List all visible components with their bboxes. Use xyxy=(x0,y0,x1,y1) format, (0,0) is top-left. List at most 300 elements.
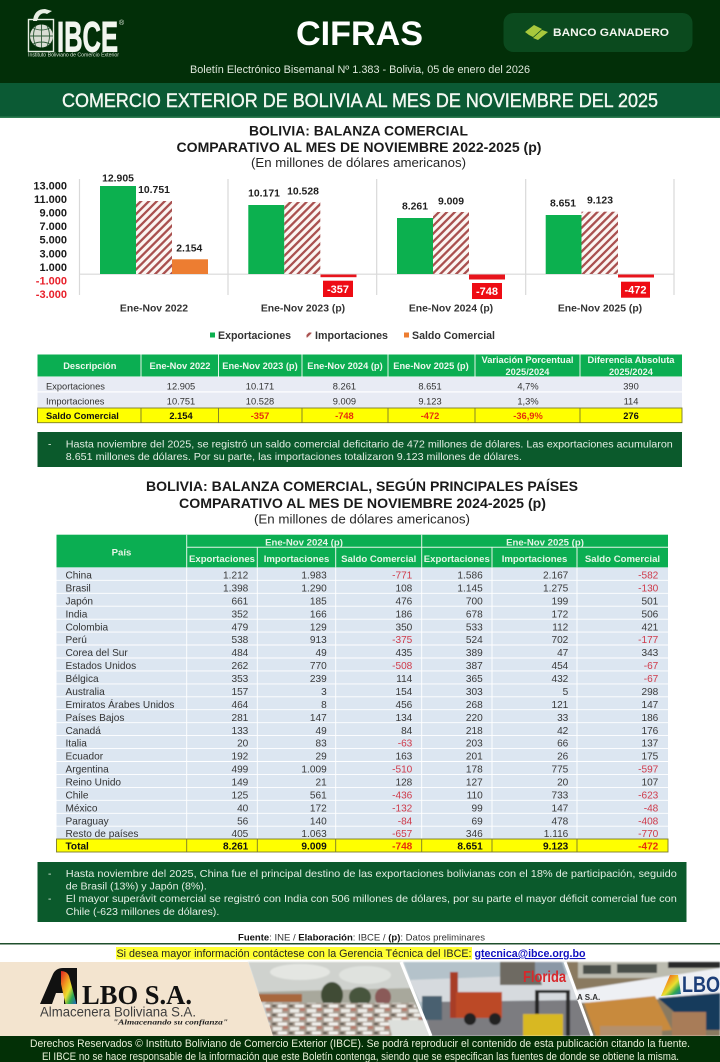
row: Australia: 157 xyxy=(231,687,249,698)
bars: Ene-Nov 2024: 8.261 xyxy=(402,202,428,213)
callout: saldo comercial: 8.651 millones de dólares. Por su parte, las importaciones totalizaron 9.123 millones de dólares. xyxy=(66,452,522,463)
table header: Exportaciones xyxy=(189,554,255,565)
y axis labels: 3.000 xyxy=(39,248,67,260)
row: Exportaciones: 390 xyxy=(623,381,639,391)
table: resumen balanza comercial xyxy=(38,354,682,423)
row: Brasil: 108 xyxy=(395,583,413,594)
callout: principales socios: - xyxy=(48,894,51,905)
row: Importaciones: Importaciones xyxy=(46,396,105,406)
row: Emiratos Arabes Unidos: Emiratos Árabes Unidos xyxy=(66,698,174,711)
table header: País xyxy=(112,548,131,558)
row: Emiratos Arabes Unidos xyxy=(66,698,659,711)
callout: principales socios: Hasta noviembre del 2025, China fue el principal destino de las exportaciones bolivianas con el 18% de participación, seguido xyxy=(66,869,677,880)
bars: Ene-Nov 2024: -748 xyxy=(476,286,498,298)
row: Paraguay: 478 xyxy=(551,816,569,827)
table header: Importaciones xyxy=(264,554,329,565)
row: China: China xyxy=(66,570,92,582)
row: Ecuador: 201 xyxy=(466,752,483,763)
bars: Ene-Nov 2025: 8.651 xyxy=(550,199,576,210)
row: Canada: 133 xyxy=(231,726,249,737)
row: Canada: 176 xyxy=(641,726,659,737)
row: Resto de paises xyxy=(66,829,659,840)
row: Estados Unidos: 262 xyxy=(231,661,249,672)
table header xyxy=(56,535,668,567)
row: India: 678 xyxy=(466,609,483,620)
heading: principales paises: COMPARATIVO AL MES DE NOVIEMBRE 2024-2025 (p) xyxy=(179,495,546,511)
row: Mexico xyxy=(66,803,659,814)
y axis labels: 13.000 xyxy=(33,180,67,192)
banner photos xyxy=(248,962,720,1036)
row: Estados Unidos: 770 xyxy=(310,661,327,672)
row: Colombia: Colombia xyxy=(66,622,109,633)
bars: Ene-Nov 2022: 12.905 xyxy=(102,174,134,185)
row: Reino Unido xyxy=(66,778,659,788)
row: Saldo Comercial: -36,9% xyxy=(513,411,543,421)
row: Chile: 110 xyxy=(467,790,483,802)
row: Italia: 137 xyxy=(641,739,659,750)
row: Brasil xyxy=(66,583,659,594)
row: Exportaciones xyxy=(38,377,682,391)
row: Australia: Australia xyxy=(66,687,105,698)
section title bar: COMERCIO EXTERIOR DE BOLIVIA AL MES DE NOVIEMBRE DEL 2025 xyxy=(62,91,658,112)
row: China: 1.212 xyxy=(223,570,249,582)
row: Total: 9.123 xyxy=(543,842,569,852)
row: Italia: 203 xyxy=(466,739,483,750)
row: Peru: Perú xyxy=(66,635,87,646)
bars: Ene-Nov 2022: Ene-Nov 2022 xyxy=(120,304,188,314)
table header: Importaciones xyxy=(502,554,567,565)
row: Paraguay: 56 xyxy=(237,816,249,827)
row: Importaciones: 9.009 xyxy=(333,396,356,406)
row: Argentina: 775 xyxy=(551,765,569,776)
row: Brasil: Brasil xyxy=(66,583,91,594)
y axis labels: 11.000 xyxy=(34,194,67,206)
row: Paraguay: Paraguay xyxy=(66,816,110,827)
section title bar xyxy=(0,83,720,118)
photo dividers xyxy=(401,962,592,1036)
row: Ecuador: 163 xyxy=(395,752,413,763)
table header: Ene-Nov 2024 (p) xyxy=(265,537,343,548)
row: Estados Unidos: 387 xyxy=(466,661,483,672)
row: Estados Unidos xyxy=(66,661,659,672)
row: Paises Bajos: 134 xyxy=(395,713,413,724)
row: Resto de paises: -770 xyxy=(638,829,659,840)
row: Belgica: 432 xyxy=(551,674,569,685)
row: Argentina: -597 xyxy=(638,765,659,776)
row: Exportaciones: 8.651 xyxy=(418,381,442,391)
row: Colombia: 350 xyxy=(395,622,413,633)
row: Exportaciones: Exportaciones xyxy=(46,381,105,391)
row: Mexico: 172 xyxy=(310,803,327,814)
row: Emiratos Arabes Unidos: 147 xyxy=(641,700,659,711)
callout: principales socios: - xyxy=(48,869,51,880)
callout: saldo comercial: Hasta noviembre del 2025, se registró un saldo comercial deficitario de 472 millones de dólares. Las exportaciones acumularon xyxy=(66,440,673,450)
row: Importaciones xyxy=(38,392,682,408)
row: Argentina: 499 xyxy=(231,765,249,776)
table header row xyxy=(38,354,682,377)
row: China: -771 xyxy=(392,570,413,582)
row: Japon xyxy=(66,596,659,607)
row: Paraguay: 140 xyxy=(310,816,327,827)
row: Belgica: 239 xyxy=(310,674,327,685)
callout: principales socios: de Brasil (13%) y Japón (8%). xyxy=(66,882,207,892)
row: Canada: 49 xyxy=(315,726,327,737)
row: Australia xyxy=(66,687,659,698)
bars: Ene-Nov 2023: 10.528 xyxy=(287,187,319,198)
row: Paises Bajos: 220 xyxy=(466,713,483,724)
row: Importaciones: 114 xyxy=(624,396,638,406)
row: Importaciones: 10.751 xyxy=(167,396,195,406)
callout: saldo comercial xyxy=(38,432,682,467)
row: Total: 8.651 xyxy=(457,842,483,852)
title: CIFRAS: CIFRAS xyxy=(296,15,423,53)
row: Chile: 561 xyxy=(310,790,327,802)
row: Resto de paises: 346 xyxy=(466,829,483,840)
row: Japon: 700 xyxy=(466,596,483,607)
sponsor: Banco Ganadero: BANCO GANADERO xyxy=(553,27,669,39)
row: Peru xyxy=(66,635,659,646)
row: Saldo Comercial: 276 xyxy=(623,411,639,421)
row: Peru: 913 xyxy=(310,635,327,646)
subtitle: Boletín Electrónico Bisemanal Nº 1.383 - Bolivia, 05 de enero del 2026 xyxy=(190,64,530,76)
source note: Fuente: INE / Elaboración: IBCE / (p): Datos preliminares xyxy=(238,932,485,944)
row: Italia: 66 xyxy=(557,739,569,750)
row: Resto de paises: 1.116 xyxy=(544,829,569,840)
row: Paises Bajos: Países Bajos xyxy=(66,713,124,724)
table header row: Ene-Nov 2024 (p) xyxy=(307,361,383,371)
legend: Importaciones xyxy=(315,330,388,342)
row: Colombia: 129 xyxy=(310,622,327,633)
row: Paraguay xyxy=(66,816,659,827)
row: Saldo Comercial xyxy=(38,408,682,423)
row: Exportaciones: 12.905 xyxy=(167,381,195,391)
row: Saldo Comercial: 2.154 xyxy=(169,411,193,421)
row: Colombia: 112 xyxy=(552,622,569,633)
row: India: 352 xyxy=(231,609,249,620)
y axis labels: -1.000 xyxy=(36,276,67,288)
table header row: Ene-Nov 2025 (p) xyxy=(393,361,469,371)
row: Total: -748 xyxy=(392,842,413,852)
bars: Ene-Nov 2025: 9.123 xyxy=(587,196,613,207)
divider line xyxy=(0,943,720,944)
row: Argentina xyxy=(66,765,659,776)
y axis labels: -3.000 xyxy=(36,289,67,301)
bars: Ene-Nov 2022 xyxy=(100,174,208,314)
row: Ecuador: 26 xyxy=(557,752,569,763)
row: Belgica: 353 xyxy=(231,674,249,685)
table header: Saldo Comercial xyxy=(585,554,660,565)
row: Japon: 199 xyxy=(551,596,569,607)
row: Emiratos Arabes Unidos: 464 xyxy=(231,700,249,711)
table header row: 2025/2024 xyxy=(506,367,550,377)
row: Saldo Comercial: -748 xyxy=(335,411,354,421)
row: Saldo Comercial: Saldo Comercial xyxy=(46,411,119,421)
row: Australia: 5 xyxy=(563,687,569,698)
row: Australia: 3 xyxy=(321,687,327,698)
row: Paises Bajos: 147 xyxy=(310,713,327,724)
table header row: Variación Porcentual xyxy=(482,355,573,365)
heading: balanza comercial: (En millones de dólares americanos) xyxy=(251,156,466,170)
table: comercio por pais xyxy=(56,535,668,852)
row: Brasil: 1.275 xyxy=(543,583,569,594)
row: Corea del Sur: 47 xyxy=(557,648,569,659)
row: Japon: 501 xyxy=(641,596,659,607)
row: Estados Unidos: Estados Unidos xyxy=(66,661,136,672)
legend: Exportaciones xyxy=(218,330,291,342)
row: China xyxy=(66,570,659,582)
y axis labels: 5.000 xyxy=(39,235,67,247)
row: Importaciones: 1,3% xyxy=(517,396,539,406)
bars: Ene-Nov 2023: -357 xyxy=(327,284,349,296)
bar chart: balanza comercial xyxy=(33,174,674,342)
bars: Ene-Nov 2023 xyxy=(248,187,356,314)
row: Saldo Comercial: -357 xyxy=(251,411,269,421)
row: Mexico: 99 xyxy=(471,803,483,814)
row: Corea del Sur: 389 xyxy=(466,648,483,659)
heading: principales paises xyxy=(146,477,578,526)
row: Peru: -375 xyxy=(392,635,413,646)
row: Argentina: 178 xyxy=(466,765,483,776)
beige panel xyxy=(0,962,273,1036)
bars: Ene-Nov 2022: 2.154 xyxy=(176,243,203,254)
row: Ecuador: Ecuador xyxy=(66,752,104,763)
table header row: 2025/2024 xyxy=(609,367,654,377)
row: Brasil: 1.398 xyxy=(223,583,249,594)
heading: principales paises: BOLIVIA: BALANZA COMERCIAL, SEGÚN PRINCIPALES PAÍSES xyxy=(146,477,578,494)
bars: Ene-Nov 2025 xyxy=(546,196,654,314)
row: Reino Unido: 127 xyxy=(466,778,483,788)
contact line: gtecnica@ibce.org.bo xyxy=(474,948,586,960)
row: Resto de paises: Resto de países xyxy=(66,829,138,840)
row: Reino Unido: 20 xyxy=(557,778,569,788)
heading: balanza comercial: BOLIVIA: BALANZA COMERCIAL xyxy=(249,122,468,138)
row: Paises Bajos: 281 xyxy=(231,713,249,724)
bars: Ene-Nov 2022: 10.751 xyxy=(138,185,170,196)
row: Belgica: 365 xyxy=(466,674,483,685)
row: Belgica: Bélgica xyxy=(66,674,99,685)
row: Ecuador: 29 xyxy=(315,752,327,763)
row: Japon: Japón xyxy=(66,596,93,607)
photo signage xyxy=(523,969,720,1002)
contact line: Si desea mayor información contáctese con la Gerencia Técnica del IBCE: xyxy=(116,948,472,960)
table header row: Ene-Nov 2023 (p) xyxy=(222,361,298,371)
row: Corea del Sur: Corea del Sur xyxy=(66,648,128,659)
row: Corea del Sur xyxy=(66,648,659,659)
row: Reino Unido: 149 xyxy=(231,778,249,788)
row: Exportaciones: 10.171 xyxy=(246,381,274,391)
heading: principales paises: (En millones de dólares americanos) xyxy=(254,512,470,526)
row: Belgica xyxy=(66,674,659,685)
row: Total: -472 xyxy=(638,842,659,852)
row: Canada: 218 xyxy=(466,726,483,737)
row: Corea del Sur: 49 xyxy=(315,648,327,659)
bars: Ene-Nov 2025: Ene-Nov 2025 (p) xyxy=(558,304,642,314)
row: Resto de paises: 405 xyxy=(231,829,249,840)
row: Japon: 476 xyxy=(395,596,413,607)
row: Corea del Sur: 435 xyxy=(395,648,413,659)
row: Reino Unido: Reino Unido xyxy=(66,778,121,788)
y axis labels: 1.000 xyxy=(39,262,67,274)
row: Resto de paises: -657 xyxy=(392,829,413,840)
logo: Almacenera Boliviana: "Almacenando su confianza" xyxy=(113,1018,228,1026)
y axis labels xyxy=(33,180,67,301)
row: Mexico: -132 xyxy=(392,803,413,814)
callout: saldo comercial: - xyxy=(48,440,51,450)
table header: Ene-Nov 2025 (p) xyxy=(506,537,584,548)
row: Emiratos Arabes Unidos: 456 xyxy=(395,700,413,711)
row: Italia: 20 xyxy=(237,739,249,750)
logo: Almacenera Boliviana: LBO S.A. xyxy=(82,980,192,1010)
row: Argentina: 1.009 xyxy=(301,765,327,776)
row: Peru: 538 xyxy=(231,635,249,646)
row: Canada xyxy=(66,726,659,737)
row: Total: 9.009 xyxy=(301,842,327,852)
sponsor banner: ALBO S.A. xyxy=(0,962,720,1036)
footer: Derechos Reservados © Instituto Boliviano de Comercio Exterior (IBCE). Se podrá reproducir el contenido de esta publicación citando la fuente. xyxy=(30,1038,690,1050)
row: Canada: 42 xyxy=(557,726,569,737)
row: Chile: 733 xyxy=(551,790,569,802)
row: Reino Unido: 128 xyxy=(395,778,413,788)
row: Paraguay: -408 xyxy=(638,816,659,827)
row: Italia: 83 xyxy=(315,739,327,750)
logo: IBCE: ® xyxy=(119,19,125,27)
row: Italia: -63 xyxy=(398,739,413,750)
row: Argentina: Argentina xyxy=(66,765,109,776)
photo signage: Florida xyxy=(523,969,566,986)
header band xyxy=(0,0,720,83)
row: Colombia: 533 xyxy=(466,622,483,633)
logo: IBCE xyxy=(28,9,125,62)
row: Paises Bajos xyxy=(66,713,659,724)
row: Paises Bajos: 186 xyxy=(641,713,659,724)
row: Total: Total xyxy=(66,842,89,852)
row: Peru: -177 xyxy=(638,635,659,646)
row: Estados Unidos: -67 xyxy=(644,661,659,672)
row: Mexico: -48 xyxy=(644,803,659,814)
row: Australia: 154 xyxy=(395,687,413,698)
row: Chile: Chile xyxy=(66,790,89,802)
row: Ecuador: 175 xyxy=(641,752,659,763)
row: Canada: Canadá xyxy=(66,726,101,737)
table header row: Descripción xyxy=(63,361,117,371)
row: India: India xyxy=(66,609,88,620)
heading: balanza comercial: COMPARATIVO AL MES DE NOVIEMBRE 2022-2025 (p) xyxy=(176,139,542,155)
row: Paises Bajos: 33 xyxy=(557,713,569,724)
bars: Ene-Nov 2025: -472 xyxy=(624,285,647,297)
row: Estados Unidos: -508 xyxy=(392,661,413,672)
bars: Ene-Nov 2023: Ene-Nov 2023 (p) xyxy=(261,304,345,314)
row: Chile: -436 xyxy=(392,790,413,802)
row: Belgica: -67 xyxy=(644,674,659,685)
row: Mexico: 147 xyxy=(551,803,569,814)
row: Colombia: 421 xyxy=(641,622,659,633)
bars: Ene-Nov 2024: 9.009 xyxy=(438,197,464,208)
y axis labels: 9.000 xyxy=(39,208,67,220)
logo: IBCE: IBCE xyxy=(57,14,118,62)
heading: balanza comercial xyxy=(176,122,542,170)
row: Reino Unido: 21 xyxy=(315,778,327,788)
row: Italia: Italia xyxy=(66,739,87,750)
row: Emiratos Arabes Unidos: 268 xyxy=(466,700,483,711)
footer xyxy=(0,1036,720,1062)
logo: Almacenera Boliviana: Almacenera Boliviana S.A. xyxy=(40,1004,196,1020)
row: Importaciones: 9.123 xyxy=(418,396,442,406)
row: Paraguay: 69 xyxy=(471,816,483,827)
callout: principales socios xyxy=(38,862,686,922)
row: Chile xyxy=(66,790,659,802)
sponsor: Banco Ganadero xyxy=(504,13,692,52)
table header: Saldo Comercial xyxy=(341,554,416,565)
row: Exportaciones: 4,7% xyxy=(517,381,539,391)
row: Italia xyxy=(66,739,659,750)
row: Peru: 702 xyxy=(551,635,569,646)
bars: Ene-Nov 2023: 10.171 xyxy=(248,189,280,200)
callout: principales socios: El mayor superávit comercial se registró con India con 506 millones de dólares, por su parte el mayor déficit comercial fue con xyxy=(66,894,677,905)
legend xyxy=(210,330,495,342)
row: Reino Unido: 107 xyxy=(641,778,659,788)
row: China: 1.586 xyxy=(457,570,483,582)
row: Japon: 185 xyxy=(310,596,327,607)
row: Emiratos Arabes Unidos: 8 xyxy=(321,700,327,711)
row: Paraguay: -84 xyxy=(398,816,413,827)
row: Brasil: 1.145 xyxy=(457,583,483,594)
bars: Ene-Nov 2024: Ene-Nov 2024 (p) xyxy=(409,304,493,314)
row: India: 186 xyxy=(395,609,413,620)
row: Saldo Comercial: -472 xyxy=(421,411,439,421)
legend: Saldo Comercial xyxy=(412,330,495,342)
bars: Ene-Nov 2024 xyxy=(397,197,505,314)
row: India xyxy=(66,609,659,620)
row: Ecuador: 192 xyxy=(231,752,249,763)
row: Colombia xyxy=(66,622,659,633)
table header row: Diferencia Absoluta xyxy=(588,355,675,365)
row: Mexico: México xyxy=(66,803,98,814)
row: Corea del Sur: 484 xyxy=(231,648,249,659)
row: Mexico: 40 xyxy=(237,803,249,814)
row: Estados Unidos: 454 xyxy=(551,661,569,672)
logo: Almacenera Boliviana xyxy=(40,968,228,1026)
row: Brasil: -130 xyxy=(638,583,659,594)
row: China: 2.167 xyxy=(543,570,569,582)
row: Total xyxy=(56,839,668,852)
row: Resto de paises: 1.063 xyxy=(301,829,327,840)
row: India: 172 xyxy=(551,609,569,620)
row: India: 506 xyxy=(641,609,659,620)
row: Australia: 303 xyxy=(466,687,483,698)
row: Total: 8.261 xyxy=(223,842,249,852)
row: China: 1.983 xyxy=(301,570,327,582)
row: Exportaciones: 8.261 xyxy=(333,381,356,391)
table header row: Ene-Nov 2022 xyxy=(150,361,210,371)
row: Australia: 298 xyxy=(641,687,659,698)
row: Argentina: -510 xyxy=(392,765,413,776)
row: Belgica: 114 xyxy=(396,674,413,685)
photo signage: A S.A. xyxy=(577,993,600,1002)
row: Importaciones: 10.528 xyxy=(246,396,274,406)
row: Corea del Sur: 343 xyxy=(641,648,659,659)
row: Chile: 125 xyxy=(231,790,249,802)
row: Chile: -623 xyxy=(638,790,659,802)
row: Emiratos Arabes Unidos: 121 xyxy=(551,700,569,711)
row: Ecuador xyxy=(66,752,659,763)
table header: Exportaciones xyxy=(424,554,490,565)
row: Brasil: 1.290 xyxy=(301,583,327,594)
row: Japon: 661 xyxy=(231,596,249,607)
row: China: -582 xyxy=(638,570,659,582)
row: India: 166 xyxy=(310,609,327,620)
row: Colombia: 479 xyxy=(231,622,249,633)
row: Peru: 524 xyxy=(466,635,483,646)
